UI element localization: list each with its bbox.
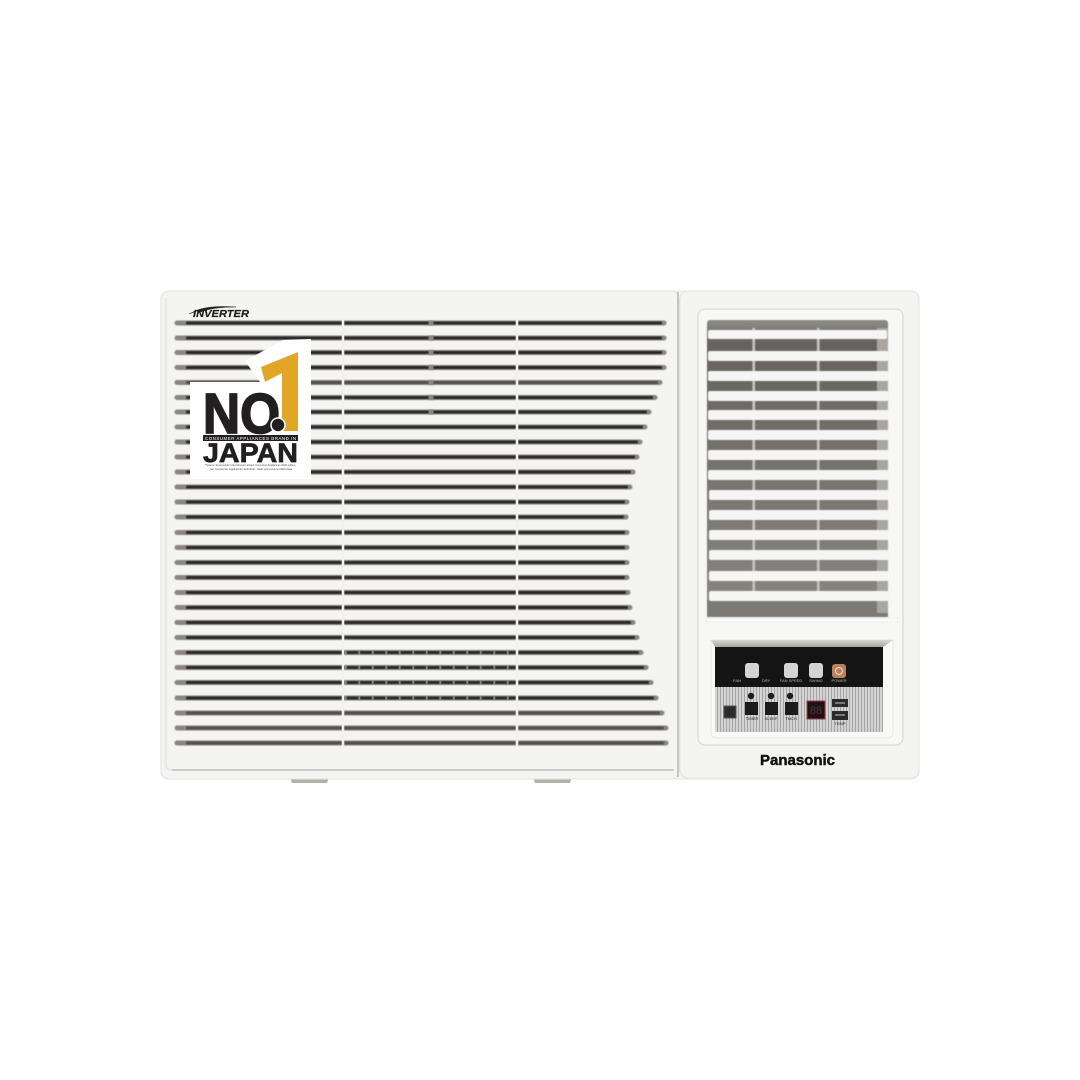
outlet and control frame	[698, 309, 903, 745]
key labels: SLEEP	[765, 716, 778, 721]
control recess	[711, 640, 893, 738]
badge strip: CONSUMER APPLIANCES BRAND IN	[205, 436, 296, 441]
unit body	[161, 291, 919, 779]
key labels	[746, 716, 846, 726]
badge dot	[271, 418, 285, 432]
outlet ledge	[706, 618, 898, 622]
badge fine print: *Source: Euromonitor International Limited; Consumer Appliances 2020 edition,	[205, 463, 296, 467]
temperature display	[807, 701, 825, 719]
button labels	[733, 678, 847, 683]
grille slots	[177, 323, 666, 743]
button labels: FAN SPEED	[780, 678, 802, 683]
badge text JAPAN: JAPAN	[203, 438, 298, 468]
panel: left intake grille	[161, 291, 679, 779]
key labels: TIMER	[746, 716, 758, 721]
logo: inverter: INVERTER	[193, 308, 249, 320]
key labels: TMCH	[785, 716, 797, 721]
badge numeral 1	[261, 352, 298, 431]
temperature display: 88	[810, 705, 822, 717]
outlet opening	[707, 320, 888, 617]
button labels: SWING	[809, 678, 823, 683]
badge text NO.: NO	[203, 382, 280, 446]
receiver	[724, 706, 736, 718]
logo: Panasonic: Panasonic	[760, 753, 835, 769]
badge: No.1 consumer appliances brand in Japan	[190, 339, 311, 479]
lower keys	[745, 693, 798, 715]
power button	[832, 664, 846, 678]
slot dividers	[343, 319, 517, 748]
button labels: FAN	[733, 678, 741, 683]
control panel	[715, 647, 883, 732]
louvres	[708, 330, 891, 601]
mounting feet	[290, 777, 572, 783]
panel: right outlet and controls	[680, 291, 919, 778]
slot segment marks	[345, 320, 516, 698]
badge fine print: per Consumer Appliances definition, retail unit volume 2020 data	[210, 467, 292, 471]
badge fine print	[205, 463, 296, 471]
top buttons	[745, 663, 823, 678]
key labels: TEMP	[834, 721, 846, 726]
button labels: POWER	[831, 678, 847, 683]
button labels: DRY	[762, 678, 771, 683]
temp keys	[832, 699, 848, 720]
